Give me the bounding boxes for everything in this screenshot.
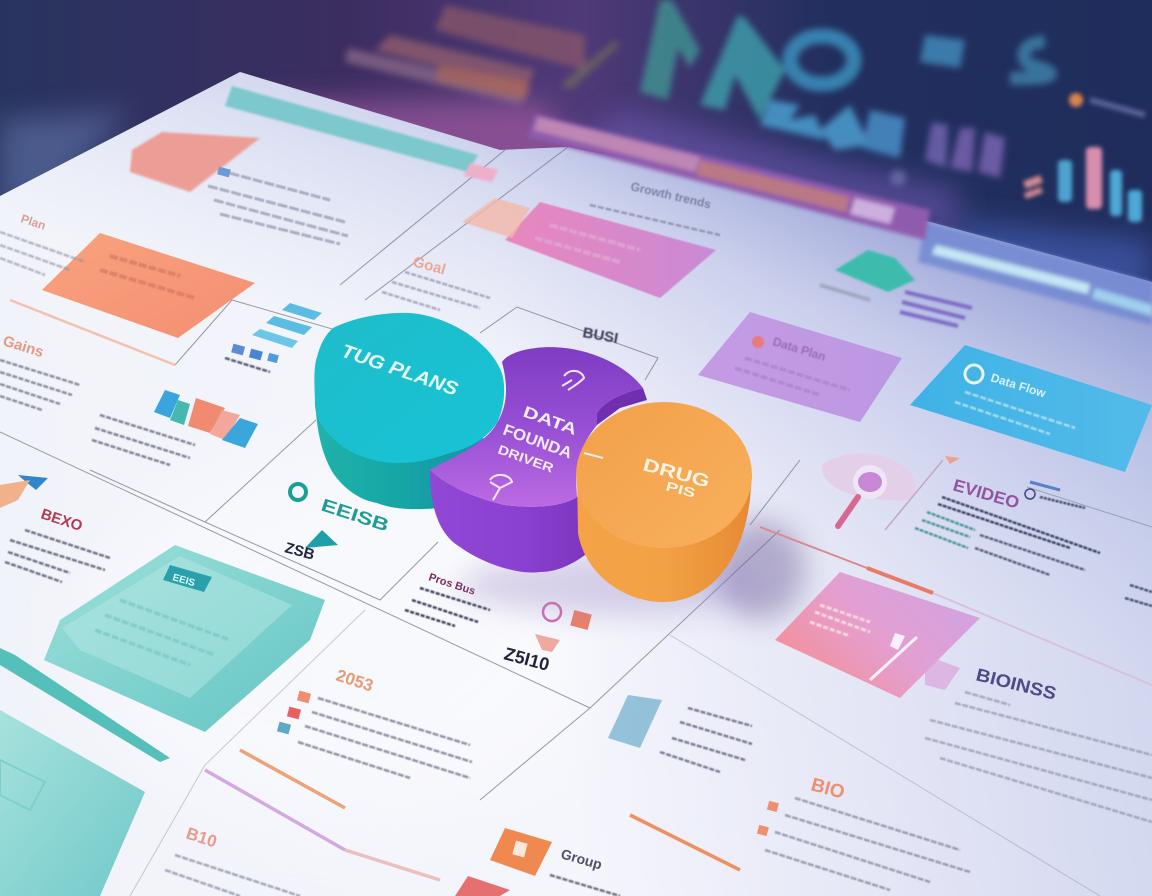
3D shape: purple piece (430, 347, 647, 573)
label: teal piece title: TUG PLANS (338, 341, 461, 401)
panel: teal icon labels: ZSB (283, 539, 317, 564)
3D shape: orange cylinder (576, 402, 752, 602)
panel: right text block: EVIDEO (951, 476, 1022, 513)
panel: right bottom text block: BIOINSS (974, 664, 1058, 704)
panel: bottom-left text: B10 (184, 824, 219, 851)
label: purple piece title: DATA (521, 404, 580, 439)
panel: central black-text card (405, 571, 592, 675)
panel: pink magenta card: Growth trends (629, 179, 713, 211)
panel: green mosaic chart (820, 250, 972, 326)
panel: teal icon labels: EEISB (319, 495, 392, 535)
blurred top heading: orange text bars (345, 5, 620, 105)
panel: blue card (910, 345, 1152, 472)
panel: left "BEXO" block with arrow icon: BEXO (39, 506, 85, 535)
shadow beside 3D shapes (715, 520, 805, 620)
accent lines: bottom coloured strokes (205, 750, 740, 880)
panel: colour block chart (92, 390, 258, 465)
panel: bottom-left teal card (0, 648, 170, 896)
panel: bottom center text card (277, 666, 472, 778)
icon: pink magnifier (822, 454, 960, 530)
panel: central black-text card: Pros Bus (427, 571, 477, 598)
panel: right text block (915, 476, 1100, 575)
panel: text near pink card (382, 253, 490, 310)
panel: blue card: Data Flow (989, 370, 1048, 401)
icon: purple piece glyph (562, 371, 584, 390)
blurred mini bar chart top right (1023, 93, 1145, 222)
icon: orange square badge (455, 828, 620, 896)
icon: purple piece pin (490, 475, 512, 500)
panel: lower right text with number: BIO (809, 775, 847, 804)
blurred headline letters (640, 0, 1050, 186)
label: orange piece title: DRUG (641, 455, 712, 491)
panel: big teal card: EEIS (171, 572, 196, 589)
panel: top-left card (130, 86, 498, 244)
panel: left text block: Plan (19, 212, 48, 233)
panel: lilac card: Data Plan (771, 334, 828, 364)
panel: pink magenta card (462, 179, 720, 298)
panel: text near pink card: Goal (411, 253, 448, 278)
accent line under orange card (10, 300, 175, 365)
panel: bottom-left text (165, 824, 300, 896)
shadow beneath 3D shapes (460, 555, 760, 615)
panel: lower right text with number (757, 775, 970, 890)
panel: coral gradient card (760, 527, 1152, 698)
panel: left list: Gains (1, 333, 46, 361)
label above shapes: BUSI (581, 324, 620, 347)
pink banner strip (528, 114, 930, 240)
panel: left list (0, 333, 80, 410)
icon: orange square badge: Group (559, 846, 604, 872)
panel: bottom center text card: 2053 (334, 666, 376, 695)
panel: orange card (42, 233, 255, 338)
panel: central black-text card: Z5I10 (502, 644, 552, 675)
3D shape: purple piece: FOUNDA (501, 422, 575, 463)
panel: teal icon labels (283, 484, 392, 564)
icon: blue list bars (225, 303, 322, 372)
3D shape: purple piece: DRIVER (496, 442, 556, 476)
soft light wash over sheet centre (80, 460, 600, 820)
3D shape: teal piece (314, 313, 504, 509)
panel: lilac card (698, 312, 902, 422)
panel: right bottom text block (925, 664, 1152, 822)
panel: right edge text fragment (1125, 585, 1152, 606)
panel: left "BEXO" block with arrow icon (0, 475, 110, 582)
panel: bottom middle text block (608, 695, 752, 772)
panel: big teal card (44, 545, 325, 732)
3D shape: orange cylinder: PIS (664, 478, 698, 501)
panel: left text block (0, 212, 85, 275)
sheet right blue panel (918, 222, 1152, 325)
background: dark blurred top (0, 0, 1152, 340)
